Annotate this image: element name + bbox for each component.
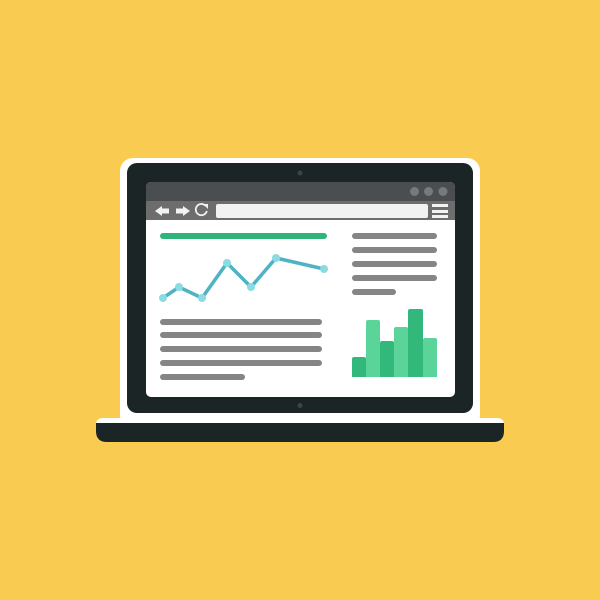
- icon: back arrow: [155, 206, 169, 216]
- text block: left column: [160, 319, 322, 380]
- line chart: [159, 254, 328, 302]
- browser title bar: [146, 182, 455, 201]
- browser toolbar: [146, 201, 455, 220]
- address bar: [216, 204, 428, 218]
- text block: right column: [352, 233, 437, 295]
- icon: menu: [432, 204, 448, 218]
- icon: reload: [196, 204, 208, 215]
- browser window: [146, 182, 455, 397]
- laptop outline: [96, 158, 504, 432]
- green heading bar: [160, 233, 327, 239]
- laptop base: [96, 423, 504, 442]
- icon: forward arrow: [176, 206, 190, 216]
- bar chart: [352, 309, 437, 377]
- laptop lid: [127, 163, 473, 413]
